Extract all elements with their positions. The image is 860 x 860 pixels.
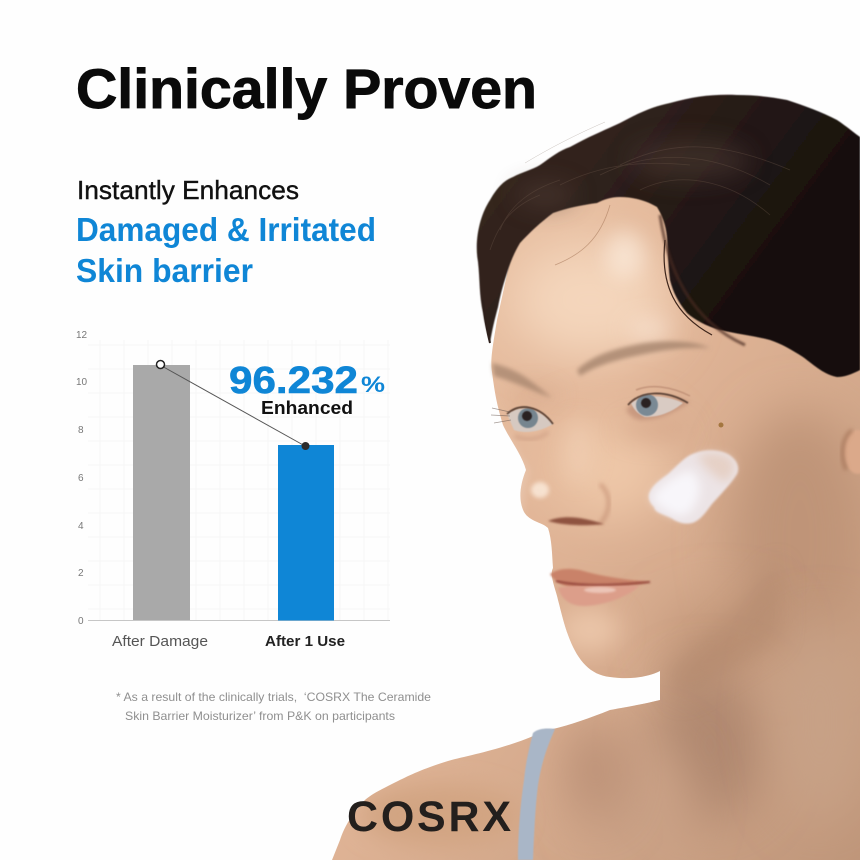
callout: 96.232% enhanced — [229, 360, 385, 418]
skin: face, neck and shoulder — [332, 196, 860, 860]
y axis labels: 10 — [76, 377, 88, 388]
subheading line: Instantly Enhances: Instantly Enhances — [77, 175, 299, 205]
axis baseline — [88, 620, 390, 622]
eye: left — [491, 407, 553, 439]
subheading — [76, 175, 376, 289]
category label: After 1 Use: After 1 Use — [265, 633, 345, 650]
bar: after 1 use — [278, 445, 334, 620]
marker: after 1 use — [302, 442, 310, 450]
subheading line: Skin barrier: Skin barrier — [76, 252, 253, 289]
y axis labels: 2 — [78, 568, 84, 579]
top strap — [518, 728, 555, 860]
eye: right — [626, 387, 690, 420]
nose shading and nostril — [531, 482, 609, 525]
bar chart — [76, 330, 390, 650]
footnote — [116, 690, 431, 723]
bar: after damage — [133, 365, 190, 620]
y axis labels: 0 — [78, 616, 84, 627]
y axis labels: 4 — [78, 521, 84, 532]
lips — [550, 569, 650, 606]
y axis labels: 8 — [78, 425, 84, 436]
COSRX logo: COSRX — [347, 793, 511, 841]
hair — [477, 95, 860, 377]
footnote line 1: * As a result of the clinically trials, ‘COSRX The Ceramide — [116, 690, 431, 704]
mole — [718, 422, 724, 428]
callout label: Enhanced — [261, 398, 353, 418]
y axis labels: 12 — [76, 330, 88, 341]
callout percent sign: % — [361, 372, 385, 397]
y axis labels: 6 — [78, 473, 84, 484]
ear — [843, 430, 860, 474]
marker: after damage — [156, 360, 164, 368]
category label: After Damage: After Damage — [112, 633, 208, 650]
connector line — [160, 365, 305, 446]
eyebrows — [492, 341, 710, 398]
cream on cheek — [649, 450, 738, 524]
y axis labels — [76, 330, 88, 627]
portrait of woman with cream on cheek — [320, 95, 860, 860]
subheading line: Damaged &amp; Irritated: Damaged & Irritated — [76, 211, 376, 248]
footnote line 2: Skin Barrier Moisturizer’ from P&K on participants — [125, 709, 395, 723]
callout value: 96.232 — [229, 360, 358, 402]
title: Clinically Proven — [76, 57, 537, 120]
hair strands — [490, 147, 790, 250]
